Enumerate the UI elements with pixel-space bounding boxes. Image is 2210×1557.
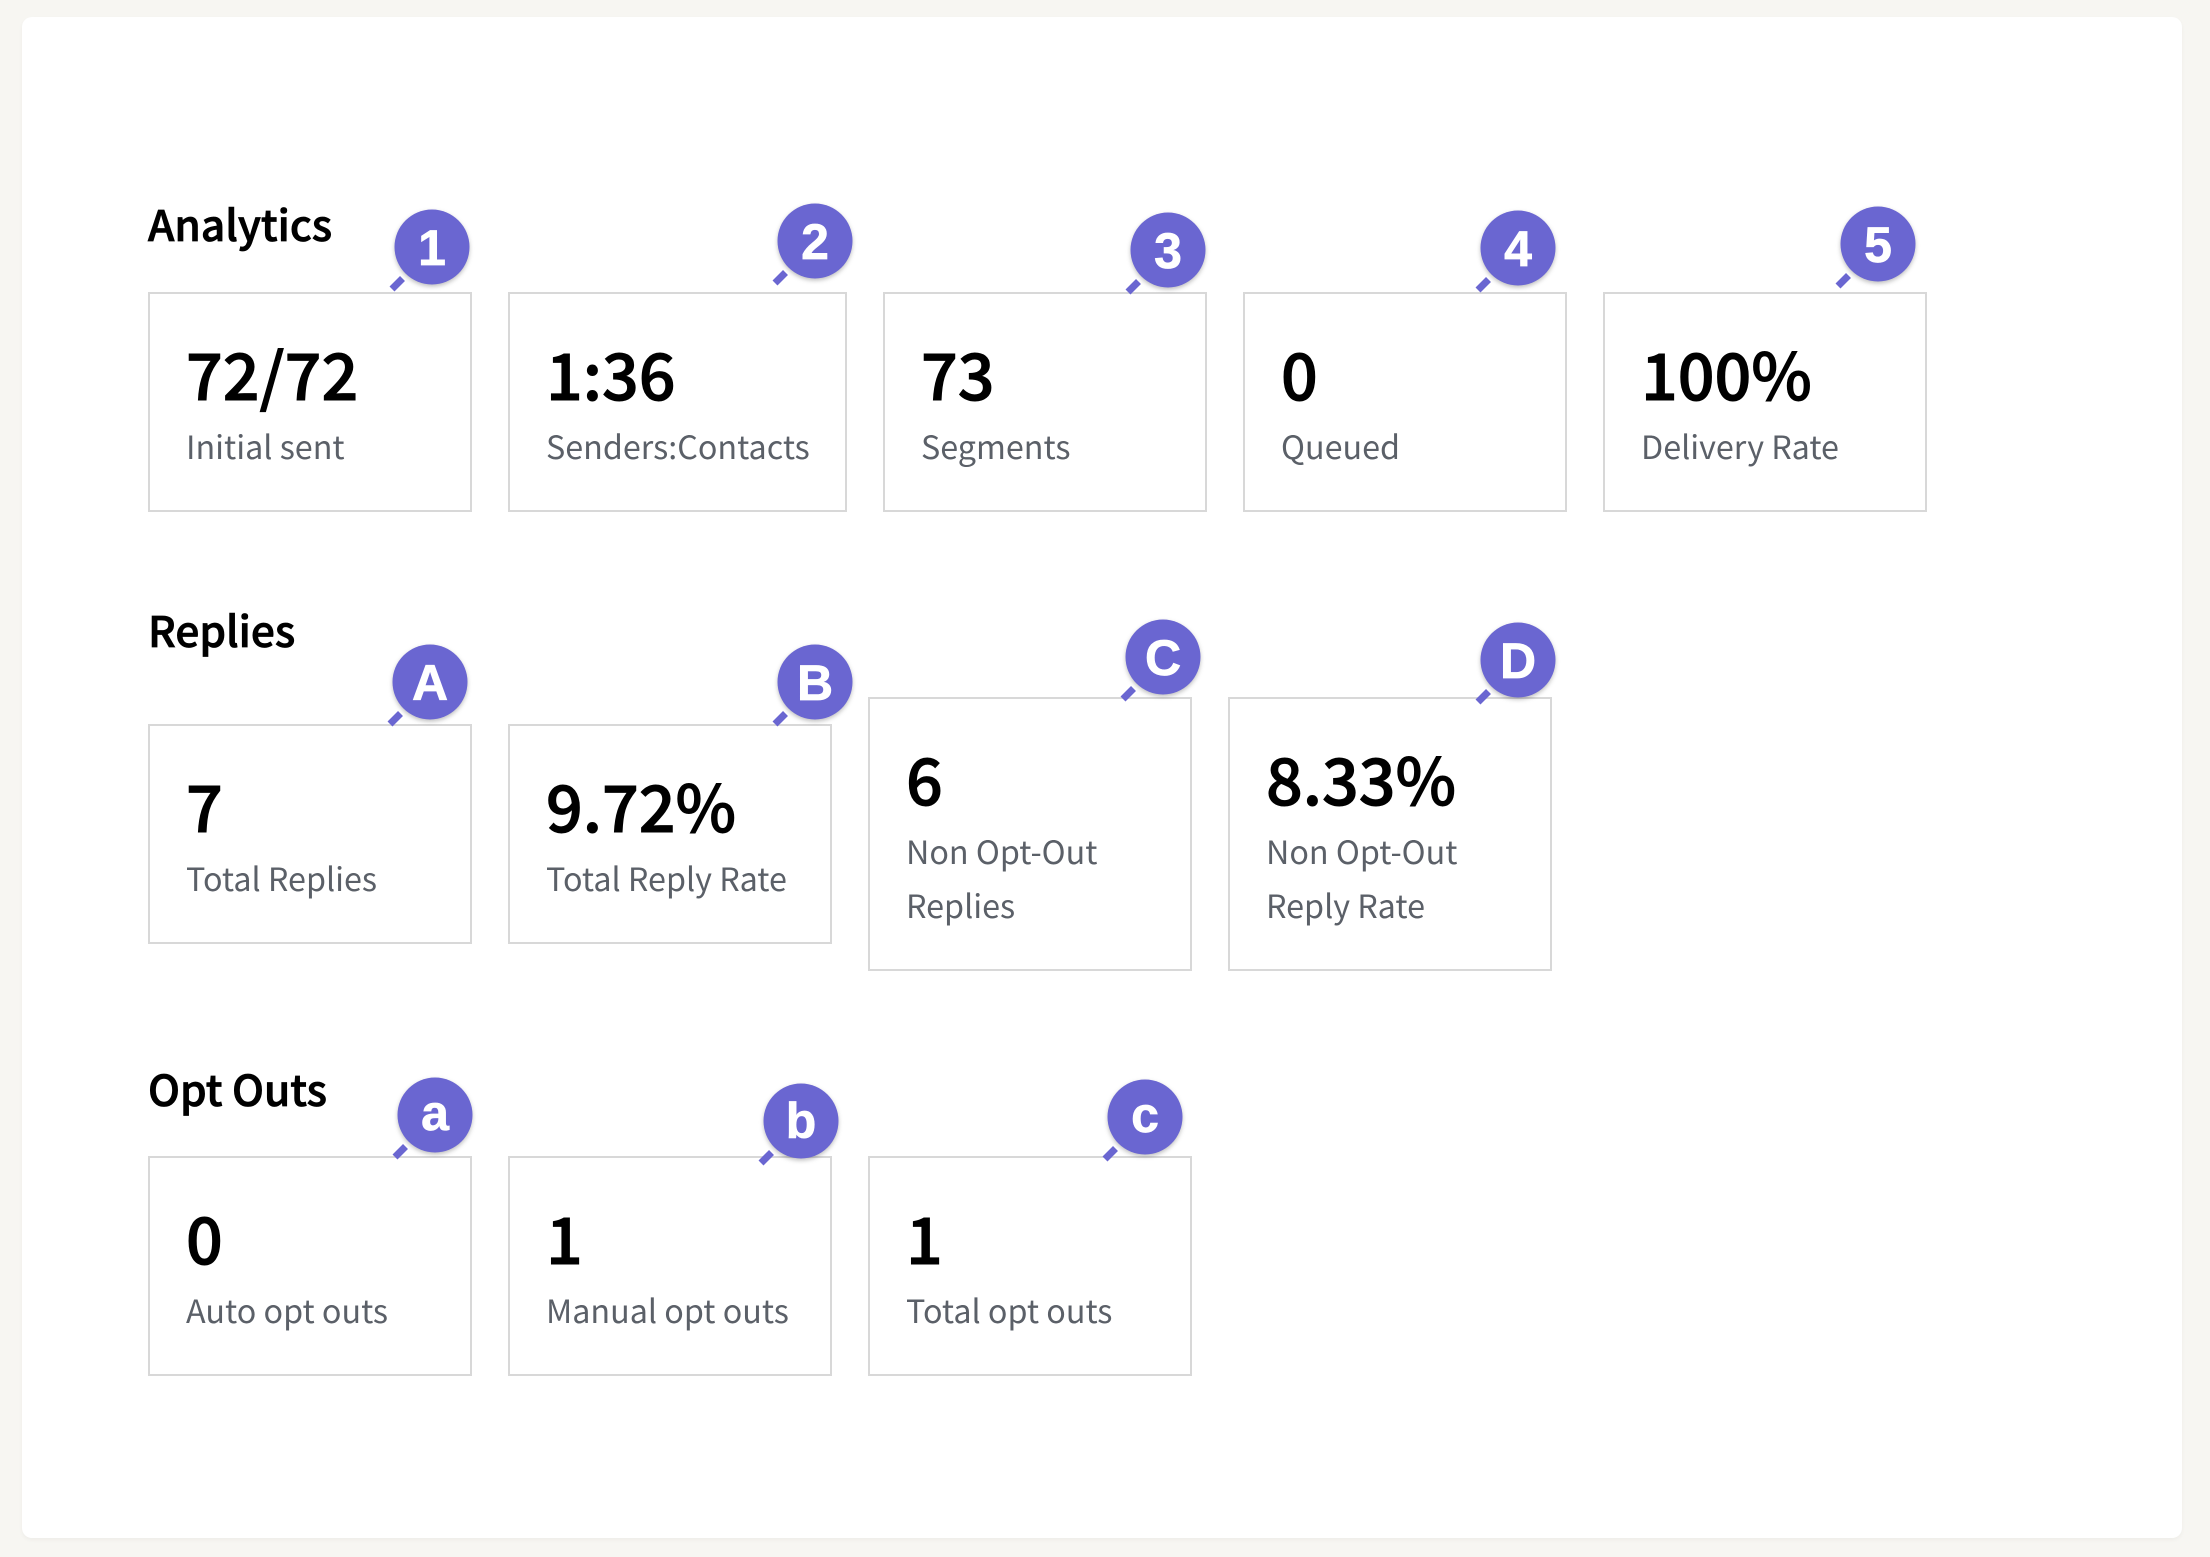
card: Initial sent: 72/72: [186, 325, 358, 419]
card: Queued: [1243, 292, 1567, 512]
card: Non Opt-Out Reply Rate: Non Opt-Out: [1266, 828, 1457, 874]
card: Non Opt-Out Replies: 6: [906, 730, 943, 824]
card: Queued: 0: [1281, 325, 1318, 419]
card: Manual opt outs: Manual opt outs: [546, 1287, 789, 1333]
badge 3: 3: [1154, 223, 1182, 279]
badge A: A: [412, 655, 448, 711]
badge C: [1120, 619, 1203, 702]
badge C: C: [1145, 630, 1181, 686]
badge 5: 5: [1864, 217, 1892, 273]
heading: Replies: Replies: [148, 599, 295, 660]
card: Senders:Contacts: 1:36: [546, 325, 676, 419]
card: Delivery Rate: [1603, 292, 1927, 512]
card: Non Opt-Out Replies: Non Opt-Out: [906, 828, 1097, 874]
badge 1: [390, 209, 472, 292]
badge D: D: [1500, 633, 1536, 689]
card: Segments: Segments: [921, 423, 1070, 469]
card: Delivery Rate: Delivery Rate: [1641, 423, 1839, 469]
card: Total Replies: [148, 724, 472, 944]
card: Total Reply Rate: 9.72%: [546, 757, 736, 851]
card: Initial sent: [148, 292, 472, 512]
card: Non Opt-Out Replies: Replies: [906, 882, 1015, 928]
badge c: c: [1131, 1087, 1159, 1143]
card: Auto opt outs: [148, 1156, 472, 1376]
badge c: [1102, 1079, 1185, 1162]
badge 3: [1126, 212, 1208, 294]
badge B: B: [797, 655, 833, 711]
badge D: [1476, 622, 1558, 704]
card: Delivery Rate: 100%: [1641, 325, 1812, 419]
badge 2: [772, 203, 855, 286]
badge a: a: [421, 1085, 450, 1141]
card: Total Reply Rate: [508, 724, 832, 944]
card: Total Reply Rate: Total Reply Rate: [546, 855, 787, 901]
badge B: [772, 644, 855, 726]
card: Total Replies: 7: [186, 757, 223, 851]
card: Non Opt-Out Reply Rate: Reply Rate: [1266, 882, 1425, 928]
card: Total opt outs: Total opt outs: [906, 1287, 1112, 1333]
card: Senders:Contacts: Senders:Contacts: [546, 423, 810, 469]
card: Manual opt outs: [508, 1156, 832, 1376]
card: Segments: [883, 292, 1207, 512]
badge b: [758, 1083, 841, 1166]
badge 2: 2: [801, 214, 829, 270]
card: Auto opt outs: 0: [186, 1189, 223, 1283]
badge a: [392, 1077, 475, 1160]
card: Total opt outs: [868, 1156, 1192, 1376]
card: Non Opt-Out Replies: [868, 697, 1192, 971]
heading: Opt Outs: Opt Outs: [148, 1058, 327, 1119]
card: Initial sent: Initial sent: [186, 423, 345, 469]
badge 5: [1836, 206, 1918, 288]
card: Auto opt outs: Auto opt outs: [186, 1287, 388, 1333]
card: Non Opt-Out Reply Rate: [1228, 697, 1552, 971]
card: Segments: 73: [921, 325, 995, 419]
card: Manual opt outs: 1: [546, 1189, 583, 1283]
badge b: b: [786, 1093, 816, 1149]
badge 4: 4: [1504, 221, 1532, 277]
heading: Analytics: Analytics: [148, 193, 332, 254]
badge A: [388, 644, 470, 726]
card: Non Opt-Out Reply Rate: 8.33%: [1266, 730, 1456, 824]
card: Total Replies: Total Replies: [186, 855, 377, 901]
badge 4: [1476, 210, 1558, 292]
card: Senders:Contacts: [508, 292, 847, 512]
badge 1: 1: [418, 220, 446, 276]
card: Total opt outs: 1: [906, 1189, 943, 1283]
card: Queued: Queued: [1281, 423, 1400, 469]
